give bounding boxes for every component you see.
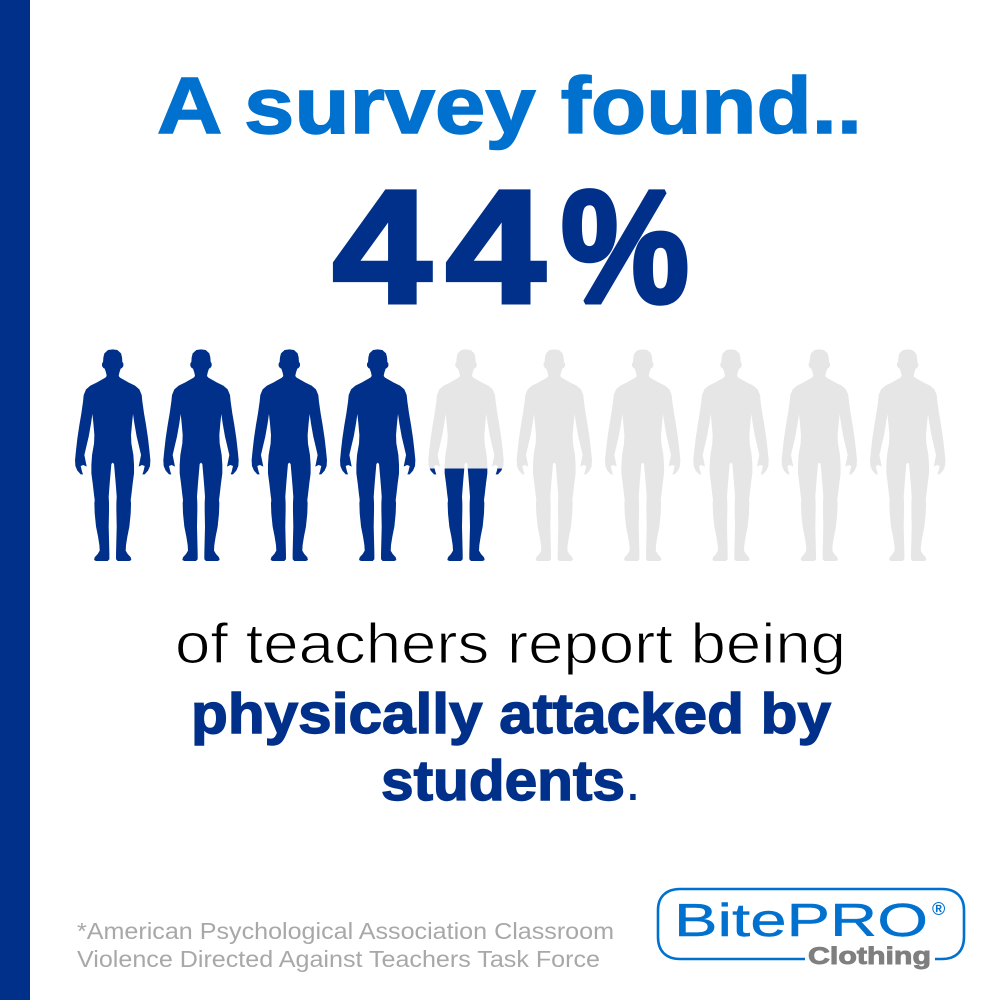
statement line 1: of teachers report being [175,612,846,676]
figure 1 filled [75,349,150,561]
second digit 4: 4 [446,157,545,336]
statement line 3: . [625,749,641,813]
footnote line 1: *American Psychological Association Classroom [77,918,614,944]
figure 2 filled [163,349,239,561]
statement line 2: physically attacked by [191,682,831,746]
big statistic: 44% [333,157,689,336]
source footnote [77,918,614,972]
logo outline [658,889,964,959]
figure 4 filled [340,349,415,561]
logo: BitePRO Clothing [658,889,964,970]
first digit 4: 4 [333,157,431,336]
logo subtitle: Clothing [808,943,931,970]
figure 6 empty [517,349,592,561]
figure 9 empty [782,349,857,561]
statement text [175,612,846,813]
figure 7 empty [605,349,680,561]
footnote line 2: Violence Directed Against Teachers Task Force [77,946,600,972]
figure 5 partly filled [428,349,504,561]
logo wordmark: BitePRO [674,894,928,946]
statement line 3: students [381,749,625,813]
registered mark: ® [932,899,945,919]
left accent bar [0,0,30,1000]
percent sign: % [561,157,689,336]
figure 3 filled [252,349,327,561]
pictogram: 44 percent of ten figures filled [75,349,945,561]
figure 10 empty [870,349,945,561]
figure 8 empty [693,349,769,561]
title: A survey found.. [157,61,862,150]
